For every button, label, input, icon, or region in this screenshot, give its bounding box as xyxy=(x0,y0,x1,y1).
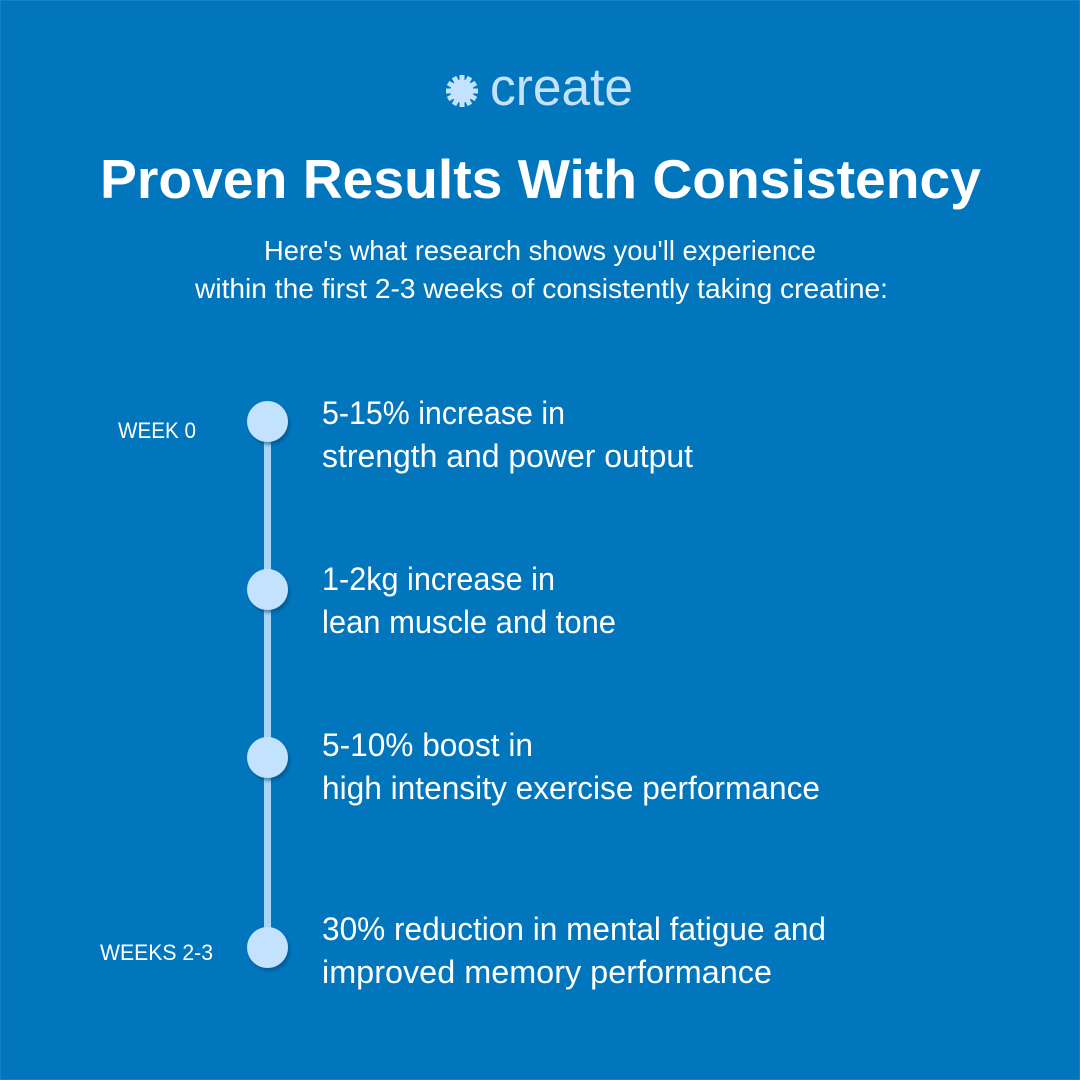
timeline xyxy=(247,401,288,968)
logo: create xyxy=(446,58,633,117)
result: strength: strength and power output xyxy=(322,438,693,474)
intro text xyxy=(194,235,888,304)
result: mental fatigue xyxy=(322,911,826,990)
result: performance xyxy=(322,727,820,806)
intro text: Here's what research shows you'll experience xyxy=(264,235,816,266)
result: muscle xyxy=(322,561,616,640)
marker: week 0 xyxy=(247,401,288,442)
timeline line xyxy=(264,421,271,947)
icon: logo burst xyxy=(446,75,478,107)
logo wordmark: create xyxy=(490,58,633,117)
marker: item 2 xyxy=(247,569,288,610)
intro text: within the first 2-3 weeks of consistently taking creatine: xyxy=(194,273,888,304)
label: week 0: WEEK 0 xyxy=(118,418,196,443)
result: strength: 5-15% increase in xyxy=(322,395,565,431)
result: mental fatigue: improved memory performance xyxy=(322,954,772,990)
result: performance: 5-10% boost in xyxy=(322,727,533,763)
result: muscle: lean muscle and tone xyxy=(322,604,616,640)
marker: weeks 2-3 xyxy=(247,927,288,968)
result: muscle: 1-2kg increase in xyxy=(322,561,555,597)
marker: item 3 xyxy=(247,737,288,778)
result: strength xyxy=(322,395,693,474)
title: Proven Results With Consistency xyxy=(100,148,981,210)
label: weeks 2-3: WEEKS 2-3 xyxy=(100,940,213,965)
result: performance: high intensity exercise performance xyxy=(322,770,820,806)
result: mental fatigue: 30% reduction in mental fatigue and xyxy=(322,911,826,947)
